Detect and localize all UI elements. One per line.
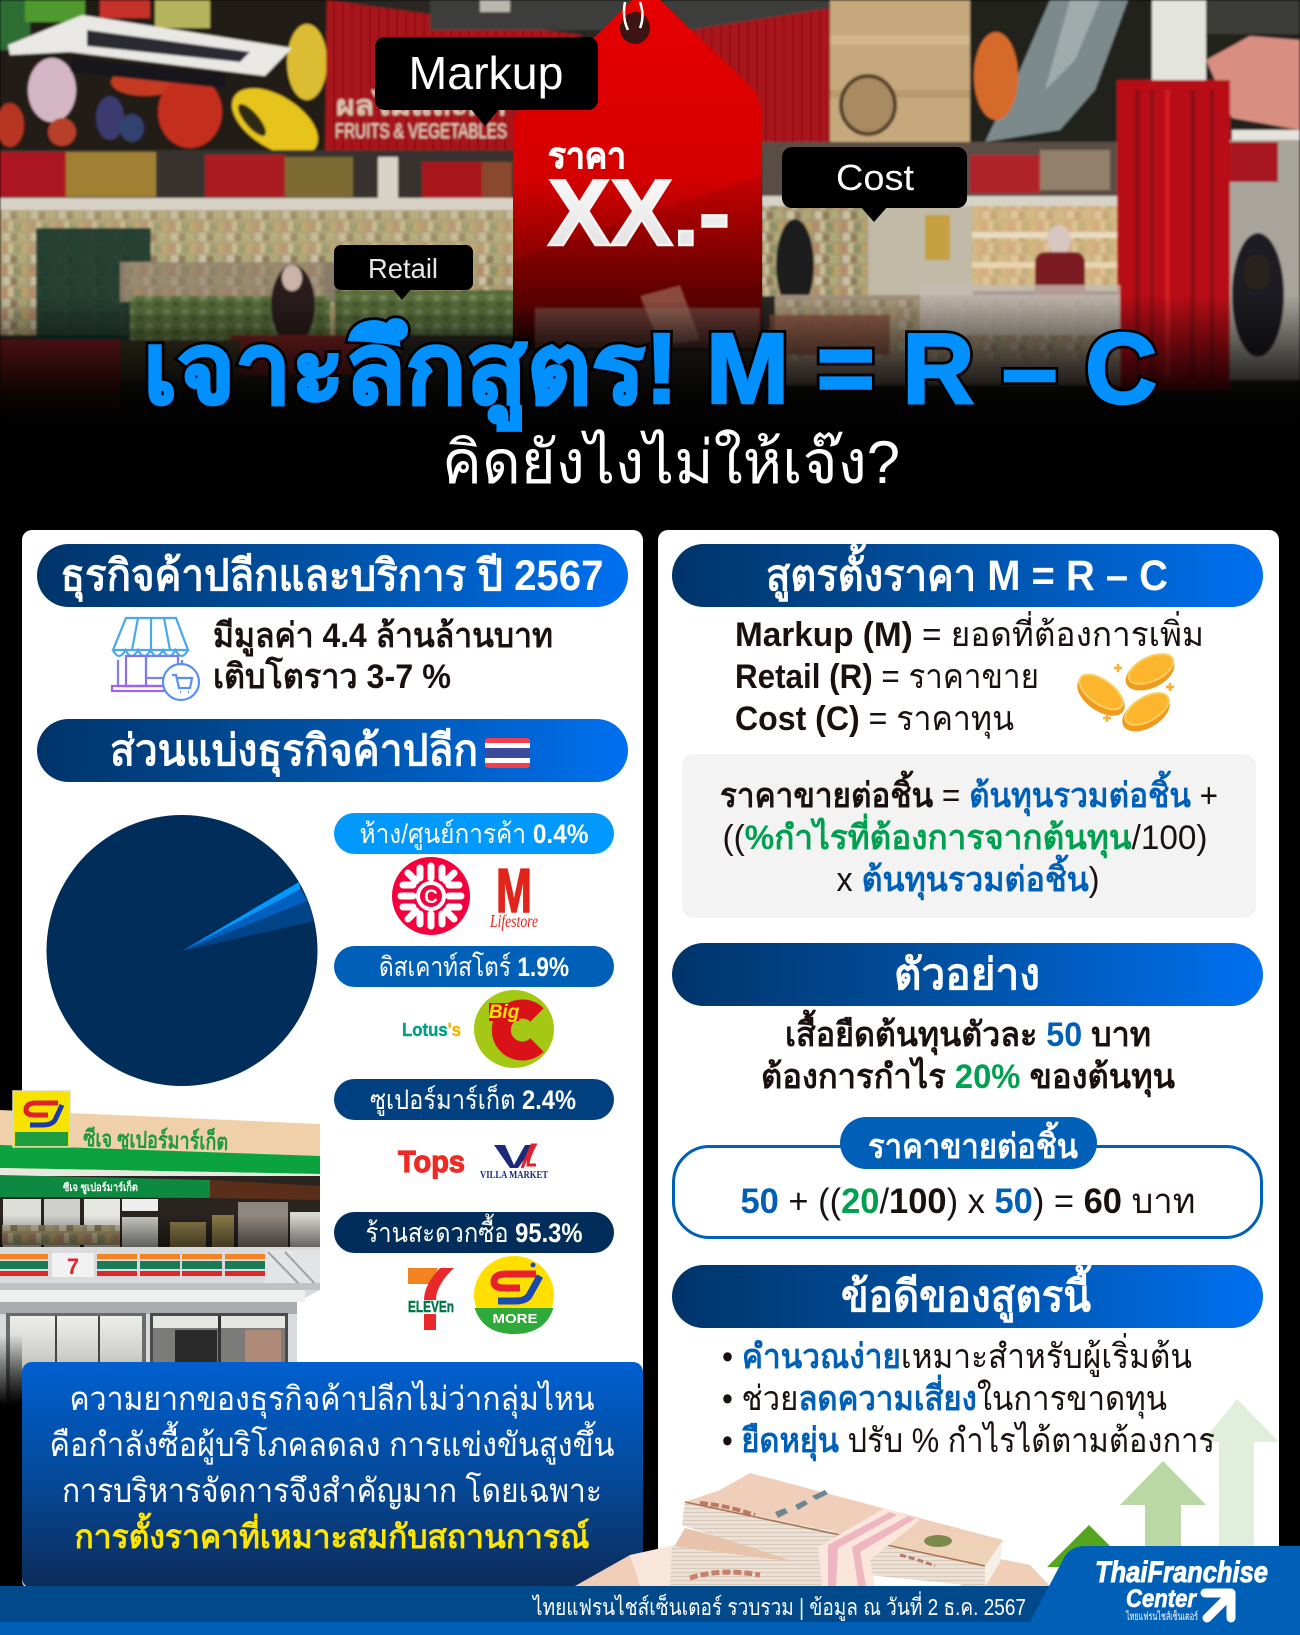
logo: ThaiFranchise Center — [1020, 1546, 1300, 1635]
text: market value and growth — [213, 617, 553, 696]
stripes — [0, 1254, 265, 1276]
7-Eleven store — [0, 1247, 320, 1405]
label: supermarket 2.4% — [334, 1079, 614, 1120]
label: convenience store 95.3% — [334, 1212, 614, 1253]
panel: retail challenge callout — [22, 1362, 643, 1588]
fish poster — [970, 0, 1300, 145]
example text: เสื้อยืดต้นทุนตัวละ 50 บาท — [785, 1009, 1151, 1056]
icon: gold coins — [1070, 648, 1180, 739]
logo: CJ More — [474, 1256, 554, 1334]
benefits list: • ช่วยลดความเสี่ยงในการขาดทุน — [722, 1374, 1167, 1419]
red sign — [325, 0, 600, 158]
label: department store 0.4%: ห้าง/ศูนย์การค้า 0.4% — [360, 818, 589, 850]
7-Eleven store: 7 — [67, 1254, 79, 1279]
calculation label — [840, 1117, 1097, 1169]
fruit poster — [0, 0, 329, 169]
logo: ThaiFranchise Center: ThaiFranchise — [1095, 1556, 1268, 1589]
definitions: Markup (M) = ยอดที่ต้องการเพิ่ม — [735, 611, 1204, 654]
heading: retail share: ส่วนแบ่งธุรกิจค้าปลีก — [110, 727, 478, 778]
logo: M Lifestore: M — [496, 857, 532, 926]
top middle and red wall — [430, 0, 830, 200]
image: stacks of banknotes — [575, 1473, 1050, 1587]
goods in front of tag — [513, 285, 763, 350]
photo: CJ supermarket storefront: ซีเจ ซูเปอร์มาร์เก็ต — [83, 1123, 229, 1157]
panel: retail challenge callout: การตั้งราคาที่เหมาะสมกับสถานการณ์ — [74, 1512, 590, 1555]
logo: Lotus's: Lotus's — [402, 1020, 461, 1040]
panel: pricing formula (right) — [658, 530, 1279, 1590]
bubble: Retail — [334, 245, 473, 300]
definitions — [735, 611, 1204, 739]
example text — [761, 1009, 1175, 1098]
heading: benefits: ข้อดีของสูตรนี้ — [841, 1264, 1092, 1323]
panel: retail challenge callout: คือกำลังซื้อผู้บริโภคลดลง การแข่งขันสูงขึ้น — [50, 1421, 614, 1465]
upper stack — [682, 1473, 1003, 1587]
produce shelves left — [0, 210, 515, 410]
label: convenience store 95.3%: ร้านสะดวกซื้อ 95.3% — [366, 1213, 582, 1248]
benefits list: • ยืดหยุ่น ปรับ % กำไรได้ตามต้องการ — [722, 1421, 1215, 1462]
panel: retail market (left) — [22, 530, 643, 1590]
bubble: Cost — [782, 147, 967, 222]
right shelves — [762, 140, 1300, 385]
bubble: Markup — [375, 37, 598, 126]
lower stack — [670, 1528, 830, 1586]
footer bar with source — [0, 1586, 1300, 1635]
photo: CJ supermarket storefront: ซีเจ ซูเปอร์มาร์เก็ต — [63, 1180, 138, 1195]
heading: benefits — [672, 1264, 1263, 1328]
panel: retail challenge callout: ความยากของธุรกิจค้าปลีกไม่ว่ากลุ่มไหน — [70, 1380, 594, 1419]
pie chart: retail share — [46, 815, 318, 1086]
bottom fade to black — [0, 295, 1300, 435]
logo: M Lifestore: Lifestore — [489, 911, 538, 931]
label: discount store 1.9%: ดิสเคาท์สโตร์ 1.9% — [379, 951, 569, 982]
definitions: Cost (C) = ราคาทุน — [735, 700, 1014, 739]
formula box — [682, 754, 1256, 918]
formula box: x ต้นทุนรวมต่อชิ้น) — [836, 854, 1100, 901]
arrows: growth — [1047, 1399, 1279, 1567]
heading: retail share — [37, 719, 628, 782]
heading: example — [672, 943, 1263, 1006]
heading: formula: สูตรตั้งราคา M = R – C — [766, 543, 1168, 602]
white and red column — [1117, 0, 1230, 390]
logo: CJ More: MORE — [492, 1311, 538, 1326]
text: market value and growth: มีมูลค่า 4.4 ล้านล้านบาท — [213, 617, 553, 657]
text: market value and growth: เติบโตราว 3-7 % — [213, 656, 451, 696]
logo: ThaiFranchise Center: Center — [1126, 1585, 1197, 1613]
tag label: ราคา: ราคา — [548, 135, 626, 176]
footer bar with source: ไทยแฟรนไชส์เซ็นเตอร์ รวบรวม | ข้อมูล ณ วันที่ 2 ธ.ค. 2567 — [531, 1591, 1026, 1621]
benefits list — [722, 1333, 1215, 1462]
label: supermarket 2.4%: ซูเปอร์มาร์เก็ต 2.4% — [370, 1082, 576, 1116]
logo: Big C: Big — [489, 1002, 520, 1023]
header photo: supermarket interior — [0, 0, 1300, 484]
calculation label: ราคาขายต่อชิ้น — [868, 1121, 1078, 1166]
heading: retail and services 2567: ธุรกิจค้าปลีกและบริการ ปี 2567 — [60, 552, 604, 603]
logo: ThaiFranchise Center: ไทยแฟรนไชส์เซ็นเตอร์ — [1125, 1609, 1198, 1623]
price tag — [513, 0, 763, 350]
heading: example: ตัวอย่าง — [894, 951, 1040, 999]
panel: retail challenge callout: การบริหารจัดการจึงสำคัญมาก โดยเฉพาะ — [62, 1472, 602, 1509]
air conditioner — [8, 15, 292, 88]
red sign: FRUITS & VEGETABLES — [335, 120, 507, 143]
logo: Central: C — [424, 887, 438, 908]
subtitle: คิดยังไงไม่ให้เจ๊ง? — [442, 428, 900, 496]
bubble: Cost: Cost — [836, 157, 914, 198]
shelf signs — [0, 150, 520, 200]
heading: formula — [672, 543, 1263, 607]
example text: ต้องการกำไร 20% ของต้นทุน — [761, 1056, 1175, 1098]
wood panel — [830, 0, 972, 146]
logo: Big C — [474, 990, 554, 1068]
tag hole — [620, 2, 650, 44]
icon: Thai flag — [485, 738, 530, 768]
paper band — [818, 1508, 920, 1586]
calculation box — [674, 1117, 1262, 1238]
bubble: Markup: Markup — [408, 47, 564, 99]
photo: CJ supermarket storefront — [0, 1091, 320, 1405]
formula box: ราคาขายต่อชิ้น = ต้นทุนรวมต่อชิ้น + — [720, 770, 1218, 817]
label: department store 0.4% — [334, 813, 614, 854]
icon: store with cart — [112, 618, 199, 700]
logo: 7-Eleven — [408, 1268, 454, 1330]
calculation box: 50 + ((20/100) x 50) = 60 บาท — [740, 1182, 1196, 1221]
label: discount store 1.9% — [334, 946, 614, 987]
benefits list: • คำนวณง่ายเหมาะสำหรับผู้เริ่มต้น — [722, 1333, 1192, 1377]
CJ sign — [13, 1091, 70, 1147]
logo: Villa Market: VILLA MARKET — [480, 1169, 549, 1181]
icon: brand arrow — [1205, 1593, 1231, 1618]
logo: Central — [392, 857, 470, 935]
bubble: Retail: Retail — [368, 253, 438, 284]
formula box: ((%กำไรที่ต้องการจากต้นทุน/100) — [722, 813, 1208, 859]
red sign: ผลไม้และผัก — [336, 89, 506, 121]
logo: 7-Eleven: ELEVEn — [408, 1299, 454, 1316]
title: เจาะลึกสูตร! M = R – C — [143, 313, 1157, 431]
tag price: XX.-: XX.- — [548, 160, 730, 265]
title: เจาะลึกสูตร! M = R – C — [143, 313, 1157, 431]
logo: Villa Market — [480, 1145, 549, 1181]
far left pile — [575, 1555, 660, 1586]
logo: Tops: Tops — [398, 1144, 465, 1179]
definitions: Retail (R) = ราคาขาย — [735, 658, 1039, 696]
logo: M Lifestore — [489, 857, 538, 931]
